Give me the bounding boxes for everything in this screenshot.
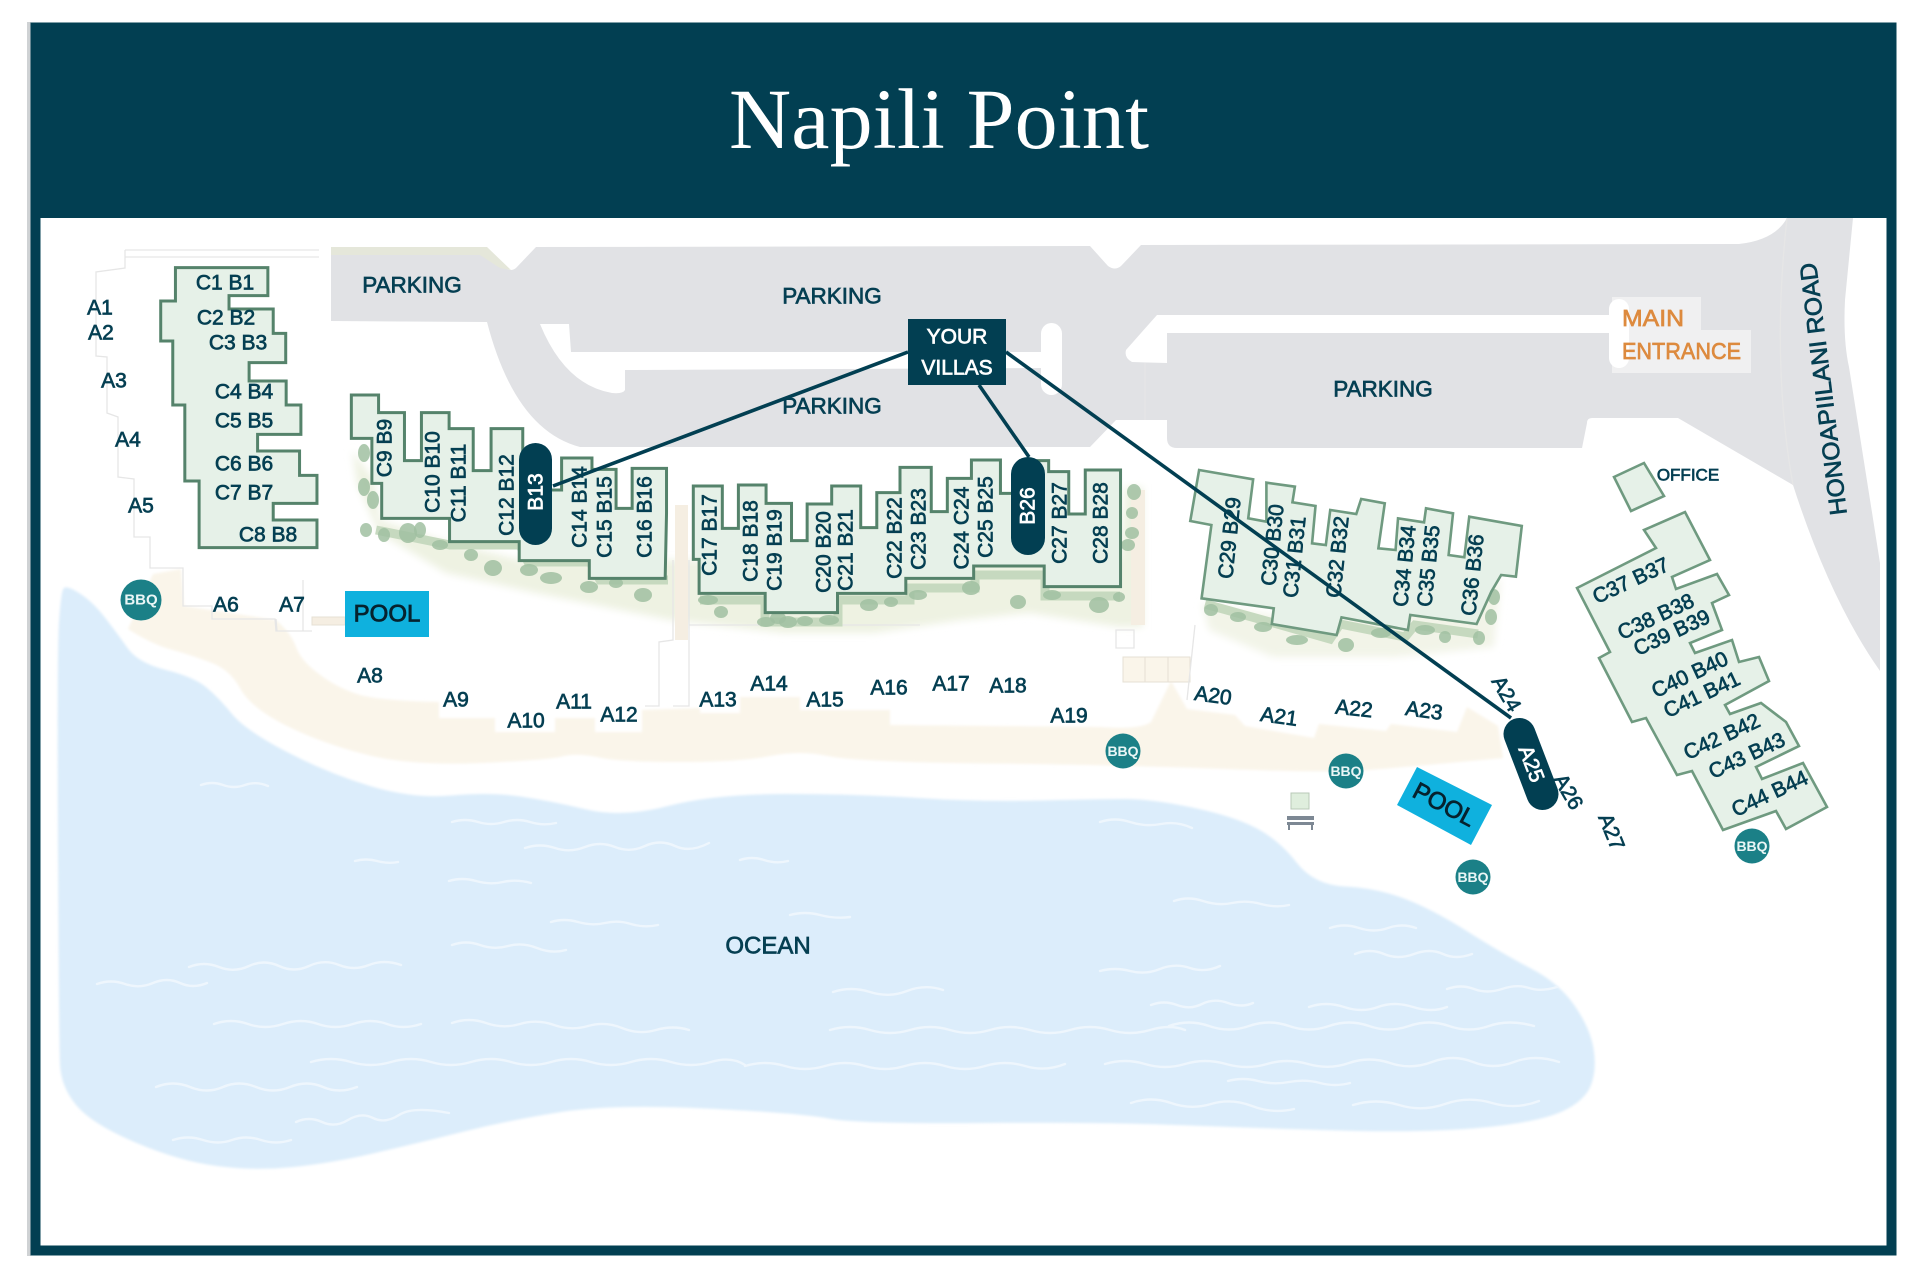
unit labels A1 to A27: A16	[870, 676, 908, 700]
pool: west: POOL	[354, 600, 420, 628]
unit labels A1 to A27: A23	[1404, 697, 1444, 725]
unit labels A1 to A27: A8	[357, 664, 383, 688]
callout: your villas: YOUR	[927, 326, 987, 348]
building: villas C17 to C28: C18 B18	[740, 500, 762, 582]
highlighted villa B13: B13	[524, 473, 548, 511]
building: villas C37 to C44: C43 B43	[1705, 728, 1789, 784]
unit labels A1 to A27: A4	[115, 428, 141, 452]
office building	[1614, 463, 1719, 511]
icon: spa square and bench	[1287, 793, 1314, 830]
highlighted villa A25: A25	[1514, 742, 1548, 786]
building: villas C17 to C28: C27 B27	[1048, 482, 1072, 564]
connector lines from callout to villas	[553, 352, 1511, 718]
building: villas C29 to C36: C31 B31	[1279, 515, 1311, 599]
parking labels: PARKING	[782, 394, 882, 418]
title: Napili Point	[729, 71, 1149, 167]
building: villas C17 to C28: C17 B17	[698, 494, 722, 576]
parking labels: PARKING	[362, 272, 462, 298]
BBQ markers: BBQ	[1736, 838, 1768, 854]
building: villas C29 to C36	[1190, 470, 1522, 635]
header band	[31, 22, 1896, 218]
landscaping beds	[352, 450, 1501, 657]
BBQ markers: BBQ	[124, 592, 158, 608]
unit labels A1 to A27: A5	[128, 494, 154, 518]
main entrance label: MAIN	[1622, 305, 1684, 331]
BBQ markers: BBQ	[1457, 869, 1489, 885]
main entrance label: ENTRANCE	[1622, 338, 1741, 364]
building: villas C17 to C28: C21 B21	[834, 509, 858, 591]
building: villas C1 to C8: C6 B6	[215, 452, 273, 476]
parking labels	[362, 272, 1433, 418]
building: villas C9 to C16: C15 B15	[594, 476, 616, 558]
unit labels A1 to A27: A21	[1259, 703, 1299, 731]
unit labels A1 to A27: A14	[750, 672, 788, 696]
building: villas C1 to C8: C1 B1	[196, 272, 254, 294]
unit labels A1 to A27: A3	[101, 370, 127, 392]
BBQ markers: BBQ	[1330, 763, 1362, 779]
building: villas C17 to C28	[693, 460, 1121, 613]
callout: your villas: VILLAS	[921, 356, 993, 380]
building: villas C1 to C8: C5 B5	[215, 410, 273, 432]
building: villas C29 to C36: C36 B36	[1457, 533, 1489, 617]
unit labels A1 to A27	[87, 296, 1629, 854]
ocean label: OCEAN	[725, 932, 811, 960]
building: villas C37 to C44: C41 B41	[1660, 667, 1744, 723]
BBQ markers	[120, 580, 1770, 894]
building: villas C1 to C8: C4 B4	[215, 380, 273, 404]
unit labels A1 to A27: A11	[556, 690, 592, 714]
unit labels A1 to A27: A17	[932, 672, 970, 696]
building: villas C17 to C28: C23 B23	[908, 488, 930, 570]
unit labels A1 to A27: A12	[600, 704, 638, 726]
building: villas C17 to C28: C19 B19	[764, 509, 786, 591]
building: villas C37 to C44: C37 B37	[1589, 553, 1673, 609]
pool: east	[1397, 767, 1492, 845]
building: villas C9 to C16: C10 B10	[422, 431, 444, 513]
building: villas C37 to C44: C42 B42	[1680, 709, 1764, 765]
building: villas C17 to C28: C22 B22	[884, 497, 906, 579]
parking labels: PARKING	[782, 284, 882, 308]
walkways and faint A-wing outlines	[96, 250, 1195, 706]
unit labels A1 to A27: A24	[1487, 672, 1525, 716]
road label: HONOAPIILANI ROAD	[1795, 261, 1853, 517]
unit labels A1 to A27: A19	[1050, 704, 1088, 728]
building: villas C37 to C44: C39 B39	[1630, 605, 1714, 661]
unit labels A1 to A27: A10	[507, 710, 545, 732]
shrubs along buildings	[358, 444, 1500, 652]
building: villas C1 to C8: C8 B8	[239, 524, 297, 546]
building: villas C29 to C36: C32 B32	[1322, 515, 1354, 599]
building: villas C17 to C28: C28 B28	[1090, 482, 1112, 564]
building: villas C1 to C8: C7 B7	[215, 482, 273, 504]
pool: east: POOL	[1408, 777, 1480, 833]
building: villas C29 to C36: C34 B34	[1389, 524, 1421, 608]
office building: OFFICE	[1657, 466, 1719, 484]
building: villas C17 to C28: C20 B20	[812, 511, 836, 593]
unit labels A1 to A27: A6	[213, 594, 239, 616]
unit labels A1 to A27: A2	[88, 322, 114, 344]
unit labels A1 to A27: A26	[1549, 770, 1587, 814]
building: villas C37 to C44	[1577, 512, 1827, 830]
building: villas C9 to C16: C11 B11	[448, 444, 470, 522]
building: villas C1 to C8: C3 B3	[209, 332, 267, 354]
ocean	[58, 587, 1595, 1169]
unit labels A1 to A27: A7	[279, 594, 305, 616]
building: villas C37 to C44: C44 B44	[1728, 766, 1812, 822]
building: villas C9 to C16: C9 B9	[374, 419, 396, 477]
highlighted villa B26: B26	[1016, 487, 1040, 525]
pool: west	[345, 591, 429, 637]
building: villas C9 to C16: C14 B14	[568, 466, 592, 548]
building: villas C29 to C36: C30 B30	[1257, 503, 1289, 587]
building: villas C1 to C8	[161, 268, 317, 548]
building: villas C37 to C44: C38 B38	[1614, 589, 1698, 645]
building: villas C17 to C28: C25 B25	[974, 476, 998, 558]
building: villas C9 to C16	[351, 395, 667, 578]
parking labels: PARKING	[1333, 376, 1433, 402]
callout: your villas	[908, 319, 1006, 385]
building: villas C1 to C8: C2 B2	[197, 306, 255, 330]
unit labels A1 to A27: A20	[1193, 682, 1233, 710]
unit labels A1 to A27: A1	[87, 296, 113, 320]
highlighted villa B26	[1011, 457, 1045, 555]
unit labels A1 to A27: A18	[989, 674, 1027, 698]
unit labels A1 to A27: A15	[806, 688, 844, 712]
building: villas C17 to C28: C24 C24	[950, 486, 974, 569]
unit labels A1 to A27: A9	[443, 688, 469, 712]
building: villas C9 to C16: C16 B16	[634, 476, 656, 558]
main entrance label	[1622, 305, 1741, 364]
ocean waves	[97, 783, 1559, 1142]
building: villas C29 to C36: C35 B35	[1413, 524, 1445, 608]
unit labels A1 to A27: A27	[1593, 810, 1629, 854]
highlighted villa B13	[519, 443, 552, 545]
unit labels A1 to A27: A22	[1334, 696, 1374, 722]
building: villas C37 to C44: C40 B40	[1648, 647, 1732, 703]
building: villas C29 to C36: C29 B29	[1214, 496, 1246, 580]
building: villas C9 to C16: C12 B12	[496, 454, 518, 536]
unit labels A1 to A27: A13	[699, 688, 737, 712]
beach sand	[128, 569, 1503, 771]
BBQ markers: BBQ	[1107, 743, 1139, 759]
parking lots and road	[331, 218, 1880, 671]
